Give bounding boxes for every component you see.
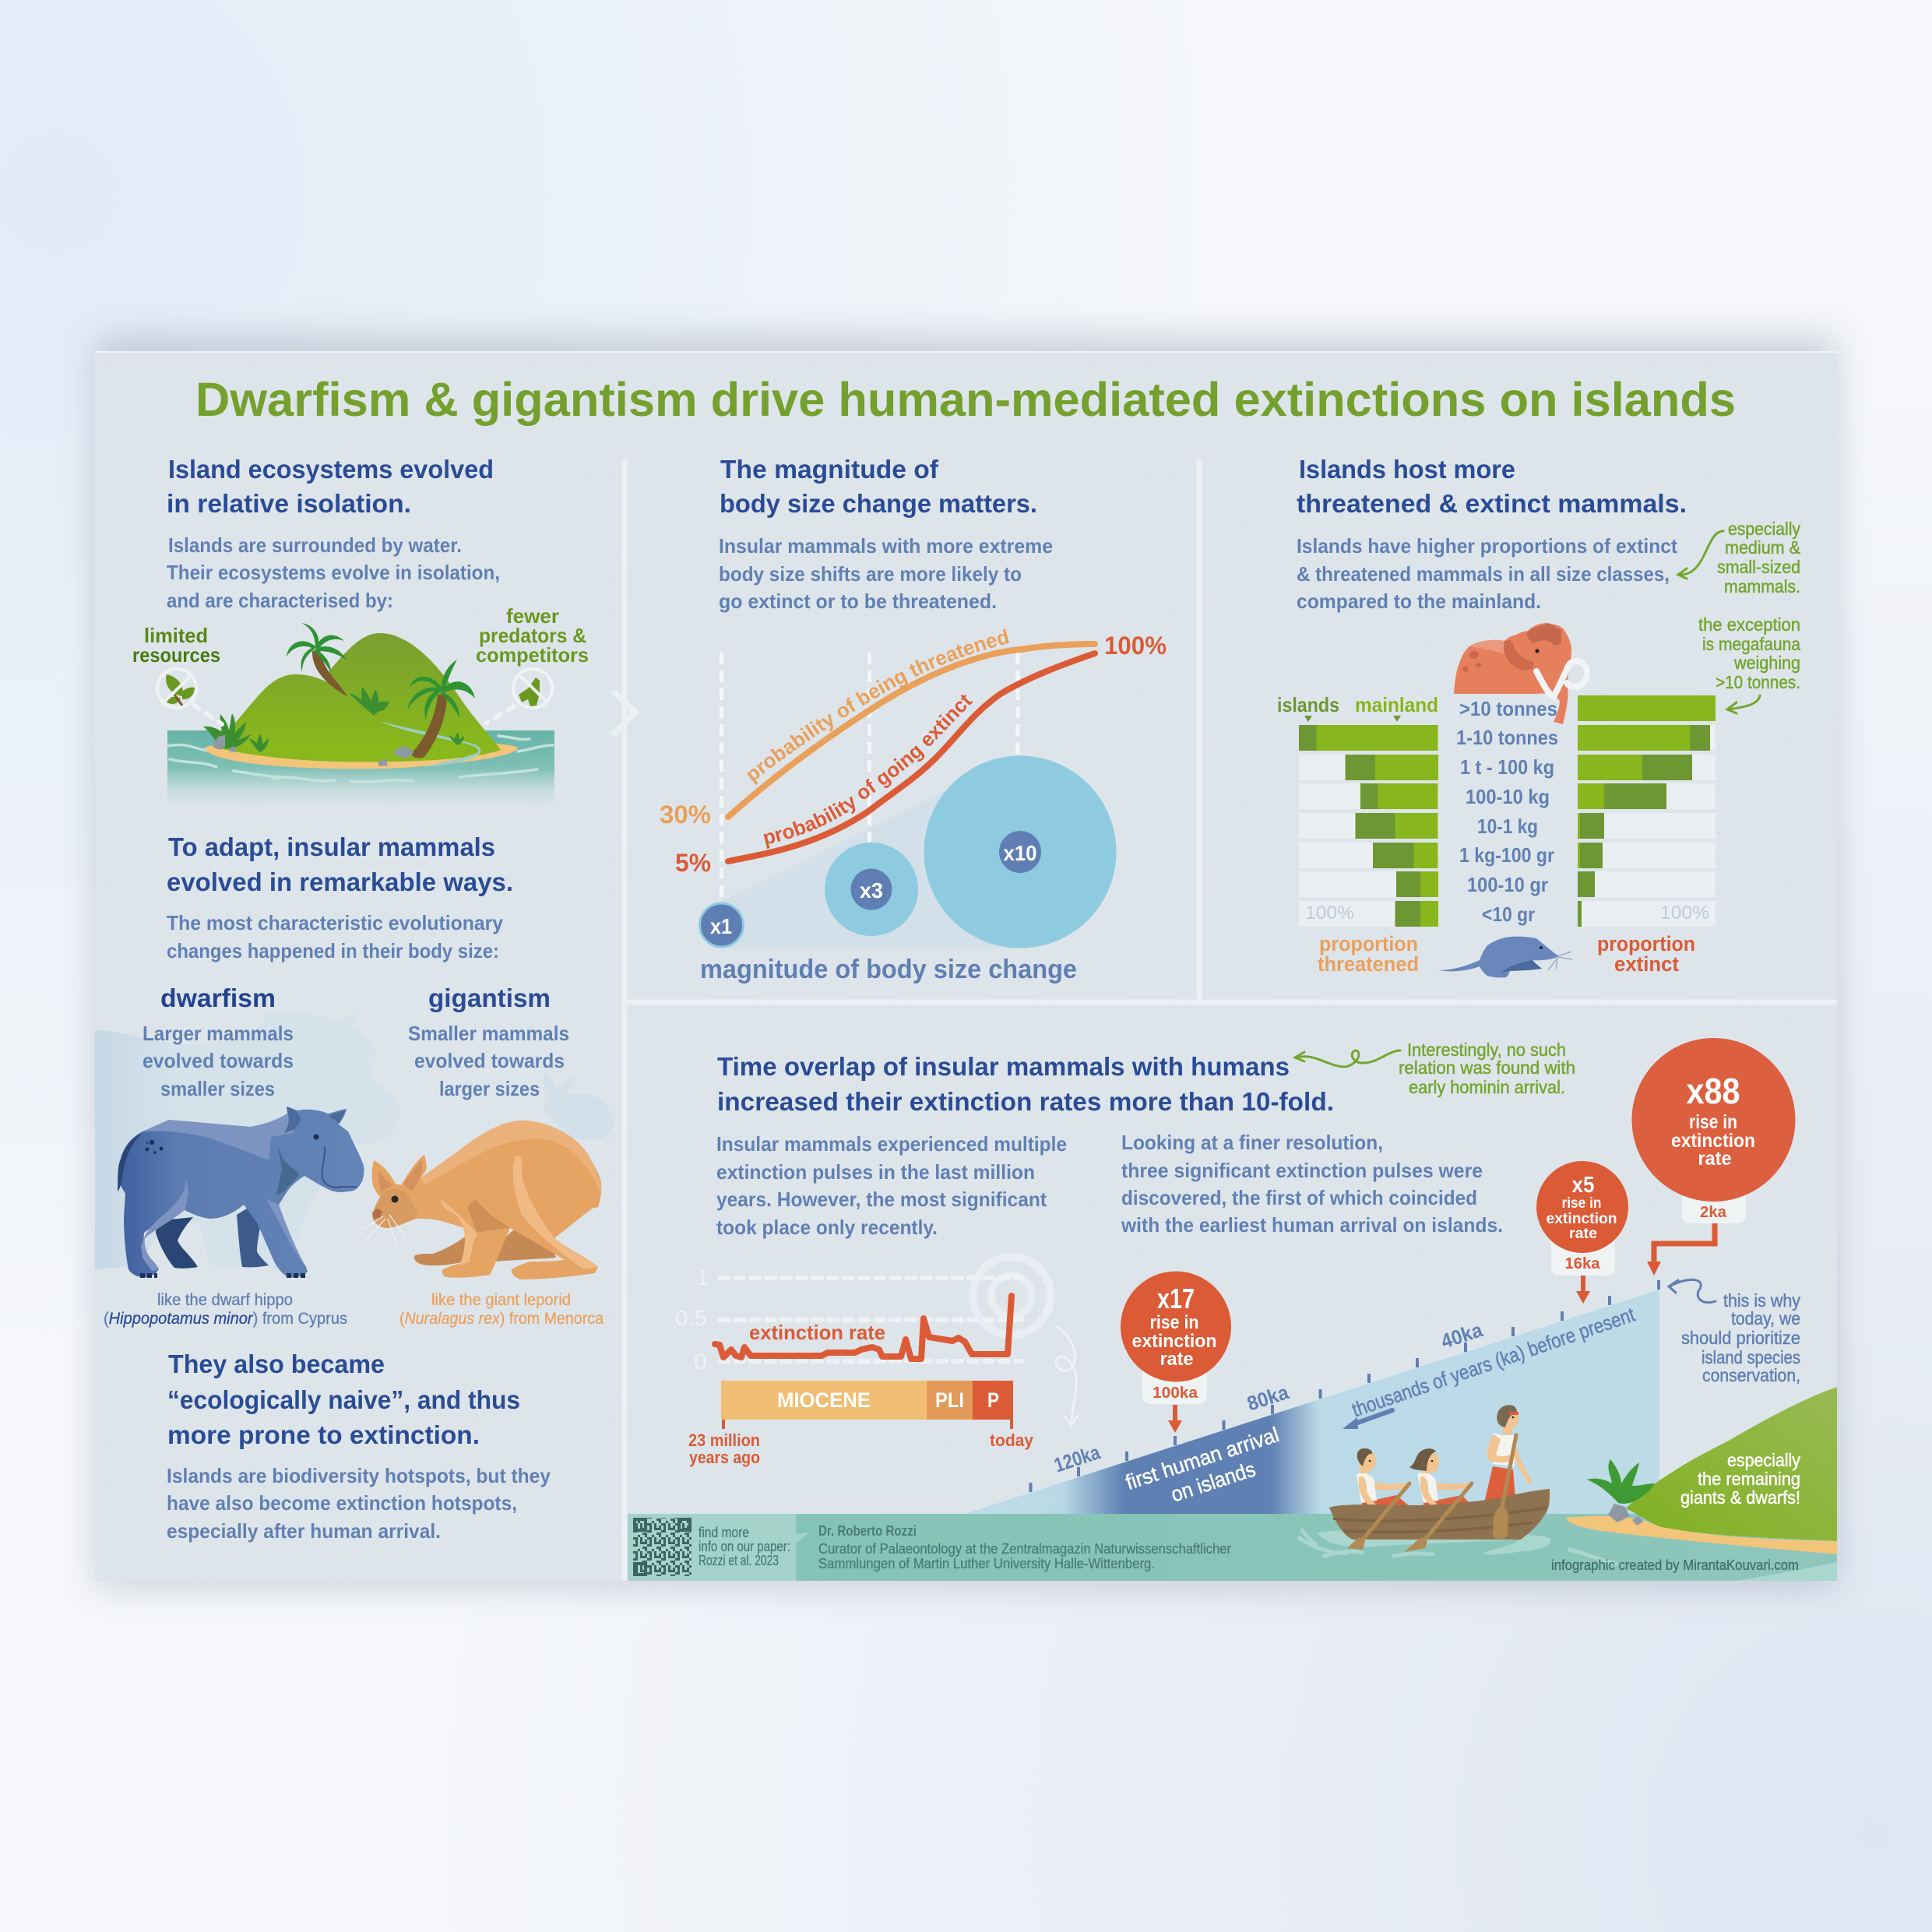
epochs bar (721, 1381, 1013, 1429)
illustration: island (157, 623, 554, 815)
text: credits: Curator of Palaeontology at the Zentralmagazin Naturwissenschaftlicher (818, 1541, 1231, 1557)
text: gigantism (408, 1022, 569, 1100)
icon: no predator (513, 669, 552, 708)
text: proportions (1297, 534, 1677, 613)
note: hominin: early hominin arrival. (1409, 1077, 1565, 1097)
water ripples (1299, 1529, 1837, 1581)
arrow: chevron (613, 691, 635, 735)
panel: left column (95, 455, 614, 1543)
panel: body size magnitude (660, 455, 1167, 984)
circle x3: x3 (860, 878, 883, 903)
axis values (675, 1265, 707, 1374)
note: especially medium: medium & (1725, 537, 1800, 558)
label: 5 percent: 5% (675, 849, 711, 877)
heading: ecologically naive: more prone to extinction. (167, 1420, 480, 1449)
epochs bar: MIOCENE (777, 1388, 871, 1412)
note: exception: the exception (1698, 614, 1800, 635)
label: remaining giants: giants & dwarfs! (1680, 1487, 1800, 1508)
icon: palm tree left (287, 623, 348, 697)
text: finer resolution: discovered, the first of which coincided (1121, 1186, 1477, 1209)
extinction rate line (715, 1296, 1012, 1359)
note: exception: is megafauna (1702, 634, 1800, 654)
timeline wedge (965, 1290, 1659, 1514)
heading: to adapt (167, 832, 513, 896)
heading: to adapt: To adapt, insular mammals (168, 832, 495, 861)
circle x10 (924, 755, 1117, 948)
caption: dwarf hippo: like the dwarf hippo (157, 1291, 293, 1309)
note: especially medium: mammals. (1724, 576, 1800, 596)
size class labels: 100-10 gr (1467, 873, 1548, 896)
note: hominin: relation was found with (1399, 1057, 1575, 1078)
label: fewer predators and competitors (476, 604, 589, 667)
label: remaining giants: especially (1727, 1450, 1800, 1470)
heading: magnitude: The magnitude of (720, 455, 939, 484)
note: hominin: Interestingly, no such (1407, 1040, 1566, 1060)
note: especially medium: especially (1728, 519, 1800, 539)
axis label: threatened (1318, 932, 1419, 976)
text: dwarfism (143, 1022, 294, 1100)
note: conservation: this is why (1723, 1290, 1800, 1311)
heading: islands host more: Islands host more (1299, 455, 1515, 484)
sand (205, 741, 518, 769)
person: rower 2 (1409, 1448, 1473, 1509)
icon: grass clumps (203, 687, 464, 752)
text: hotspots: have also become extinction hotspots, (167, 1491, 517, 1515)
text: finer resolution: with the earliest human arrival on islands. (1121, 1213, 1503, 1237)
curve: extinct (728, 653, 1095, 861)
note: hominin (1399, 1040, 1575, 1097)
heading: ecologically naive (167, 1350, 520, 1449)
label: fewer predators and competitors: competitors (476, 643, 589, 667)
caption: dwarf hippo (104, 1291, 347, 1328)
heading: island ecosystems: Island ecosystems evolved (168, 455, 494, 484)
headings: dwarfism and gigantism (160, 984, 551, 1012)
label: fewer predators and competitors: fewer (506, 604, 559, 628)
callout: x88: x88 (1687, 1071, 1740, 1111)
callout: x5: x5 (1571, 1173, 1595, 1198)
icon: no leaves (157, 669, 196, 708)
note: conservation: island species (1701, 1347, 1800, 1367)
axis maxima: 100% (1305, 903, 1354, 924)
note: conservation: should prioritize (1681, 1328, 1800, 1348)
callout: x88: extinction (1671, 1130, 1755, 1152)
chart: extinction rate (675, 1257, 1050, 1467)
icon: rocks (213, 735, 413, 766)
callout: x17: 100ka (1153, 1385, 1198, 1402)
callout: x17: extinction (1132, 1331, 1216, 1352)
heading: to adapt: evolved in remarkable ways. (167, 867, 513, 896)
callout: x88 (1632, 1038, 1796, 1276)
arrow: conservation note (1669, 1279, 1716, 1303)
label: 23 million (688, 1431, 760, 1467)
arrow: especially note (1678, 531, 1723, 579)
callout: x88: rate (1698, 1148, 1732, 1170)
callout: x5 (1536, 1161, 1628, 1304)
concentric highlight (973, 1257, 1050, 1335)
text: finer resolution (1121, 1131, 1503, 1237)
label: 30 percent: 30% (660, 801, 711, 829)
heading: ecologically naive: “ecologically naive”, and thus (167, 1385, 520, 1414)
size class labels: 1-10 tonnes (1456, 726, 1558, 749)
arrow head: time direction (1343, 1417, 1358, 1429)
axis maxima: 100% (1660, 903, 1709, 924)
heading: ecologically naive: They also became (168, 1350, 385, 1378)
text: magnitude: Insular mammals with more extreme (719, 534, 1053, 558)
text: credits (818, 1523, 1231, 1571)
panel: threatened and extinct mammals (1277, 455, 1800, 977)
label: axis thousands of years: thousands of years (ka) before present (1349, 1302, 1638, 1421)
axis label: threatened: threatened (1318, 952, 1419, 976)
arrow: zoom squiggle (1056, 1326, 1078, 1425)
legend: islands and mainland (1277, 693, 1438, 722)
caption: dwarf hippo: (Hippopotamus minor) from Cyprus (104, 1310, 347, 1328)
text: proportions: & threatened mammals in all size classes, (1297, 562, 1670, 586)
text: magnitude: body size shifts are more likely to (719, 562, 1022, 586)
river (379, 721, 480, 767)
text: dwarfism: smaller sizes (160, 1077, 275, 1100)
labels: ka ticks (1051, 1318, 1486, 1477)
text: find more: info on our paper: (699, 1539, 790, 1554)
QR code (633, 1518, 692, 1576)
label: today: today (990, 1431, 1034, 1450)
label: first human arrival: first human arrival (1123, 1423, 1282, 1494)
dotted callout lines (193, 705, 514, 724)
illustration: island shore (1567, 1387, 1837, 1554)
heading: islands host more (1297, 455, 1687, 518)
boat hull (1329, 1489, 1550, 1540)
epochs bar: P (987, 1388, 999, 1412)
text: hotspots (167, 1464, 551, 1543)
label: limited resources (132, 624, 220, 667)
circle x10: x10 (1003, 841, 1037, 865)
column dividers (625, 459, 1837, 1581)
illustration: dwarf hippo (118, 1107, 364, 1278)
note: especially medium (1717, 519, 1800, 596)
card shadow (95, 336, 1837, 1587)
text: proportions: compared to the mainland. (1297, 589, 1541, 613)
icon: palm tree right (407, 660, 475, 758)
text: dwarfism: evolved towards (143, 1049, 294, 1072)
text: dwarfism: Larger mammals (143, 1022, 294, 1045)
heading: islands host more: threatened & extinct mammals. (1297, 489, 1687, 518)
text: extinction pulses: years. However, the most significant (716, 1188, 1047, 1211)
axis label: extinct: extinct (1614, 952, 1679, 976)
text: gigantism: larger sizes (439, 1077, 540, 1100)
note: conservation: today, we (1731, 1308, 1800, 1328)
axis label: threatened: proportion (1319, 932, 1418, 955)
text: credits: Sammlungen of Martin Luther University Halle-Wittenberg. (818, 1556, 1155, 1571)
oars and paddle (1363, 1435, 1516, 1540)
note: exception (1698, 614, 1800, 692)
callout: x5: rate (1569, 1226, 1597, 1242)
title: Dwarfism & gigantism drive human-mediated extinctions on islands (195, 373, 1736, 426)
headings: dwarfism and gigantism: dwarfism (160, 984, 276, 1012)
size class labels: 10-1 kg (1477, 815, 1538, 838)
curve: threatened (728, 644, 1095, 817)
label: remaining giants (1680, 1450, 1800, 1508)
text: extinction pulses: extinction pulses in the last million (716, 1160, 1035, 1184)
epochs bar: PLI (935, 1388, 964, 1412)
label: limited resources: resources (132, 643, 220, 667)
callout: x88: rise in (1689, 1111, 1737, 1133)
text: islands intro: and are characterised by: (167, 589, 393, 612)
bars: threatened (1299, 725, 1438, 927)
heading: island ecosystems (167, 455, 494, 518)
size class labels: 1 t - 100 kg (1460, 755, 1554, 779)
label: fewer predators and competitors: predators & (479, 624, 586, 647)
illustration: giant leporid (362, 1121, 601, 1279)
label: remaining giants: the remaining (1698, 1469, 1800, 1489)
callout: x17: rate (1160, 1349, 1193, 1370)
label: 23 million: years ago (689, 1448, 760, 1467)
caption: giant leporid (399, 1291, 604, 1328)
panel: human overlap timeline (628, 1038, 1837, 1581)
heading: time overlap: increased their extinction rates more than 10-fold. (717, 1087, 1334, 1116)
axis values: 1 (699, 1265, 707, 1290)
label: first human arrival: on islands (1168, 1457, 1258, 1507)
text: magnitude: go extinct or to be threatened. (719, 589, 997, 613)
caption: giant leporid: (Nuralagus rex) from Menorca (399, 1310, 604, 1328)
label: extinction rate: extinction rate (749, 1321, 885, 1344)
illustration: rowing boat with people (1329, 1405, 1550, 1552)
timeline ticks (1031, 1280, 1659, 1492)
axis label: extinct (1597, 932, 1695, 976)
note: exception: >10 tonnes. (1716, 672, 1800, 692)
chart: body size probability curves (660, 629, 1167, 984)
text: body size: changes happened in their body size: (167, 939, 499, 962)
size class labels: >10 tonnes (1459, 697, 1557, 720)
size class labels: 1 kg-100 gr (1459, 843, 1554, 867)
note: exception: weighing (1733, 653, 1800, 673)
text: body size (167, 911, 504, 962)
text: hotspots: Islands are biodiversity hotspots, but they (167, 1464, 551, 1487)
text: body size: The most characteristic evolutionary (167, 911, 504, 934)
labels: ka ticks: 80ka (1244, 1380, 1292, 1416)
axis label: extinct: proportion (1597, 932, 1695, 955)
callout: x5: extinction (1547, 1211, 1617, 1227)
text: finer resolution: three significant extinction pulses were (1121, 1159, 1483, 1182)
text: find more: Rozzi et al. 2023 (699, 1553, 779, 1568)
text: credits: Dr. Roberto Rozzi (818, 1523, 917, 1539)
text: islands intro (167, 533, 500, 612)
heading: time overlap (717, 1052, 1334, 1116)
arrow: time direction (1351, 1410, 1392, 1425)
label: 23 million: 23 million (688, 1431, 760, 1450)
label: limited resources: limited (144, 624, 208, 647)
note: especially medium: small-sized (1717, 557, 1800, 577)
illustration: mammoth (1454, 623, 1587, 724)
text: proportions: Islands have higher proportions of extinct (1297, 534, 1677, 558)
text: magnitude (719, 534, 1053, 613)
axis values: 0 (694, 1350, 707, 1374)
ghost silhouette: large hippo (95, 1012, 399, 1279)
heading: island ecosystems: in relative isolation. (167, 489, 411, 518)
callout: x88: 2ka (1700, 1204, 1727, 1221)
legend: islands and mainland: islands (1277, 693, 1339, 716)
axis label: magnitude of body size change (700, 955, 1077, 984)
axis maxima (1305, 903, 1709, 924)
text: find more (699, 1525, 790, 1568)
callout: x5: 16ka (1565, 1255, 1600, 1272)
labels: ka ticks: 40ka (1438, 1318, 1486, 1353)
text: extinction pulses: took place only recently. (716, 1216, 938, 1239)
circle x1: x1 (710, 914, 732, 938)
label: 100 percent: 100% (1104, 632, 1167, 660)
text: hotspots: especially after human arrival. (167, 1519, 441, 1543)
heading: magnitude (720, 455, 1037, 518)
text: infographic credit: infographic created by MirantaKouvari.com (1551, 1557, 1799, 1573)
text: find more: find more (699, 1525, 749, 1540)
bars: extinct (1578, 695, 1716, 927)
note: conservation (1681, 1290, 1800, 1385)
label: extinct probability: probability of going extinct (763, 695, 973, 849)
illustration: shrew (1438, 937, 1572, 977)
size class labels: 100-10 kg (1466, 785, 1550, 808)
label: threatened probability: probability of being threatened (746, 629, 1009, 785)
heading: magnitude: body size change matters. (720, 489, 1037, 518)
caption: giant leporid: like the giant leporid (431, 1291, 571, 1309)
infographic card (95, 351, 1837, 1581)
size class labels (1456, 697, 1558, 926)
axis values: 0.5 (675, 1306, 707, 1330)
heading: time overlap: Time overlap of insular mammals with humans (717, 1052, 1290, 1081)
text: islands intro: Islands are surrounded by water. (168, 533, 462, 557)
callout: x5: rise in (1562, 1195, 1601, 1212)
headings: dwarfism and gigantism: gigantism (428, 984, 551, 1012)
arrow: hominin note (1295, 1050, 1400, 1067)
person: rower 1 (1357, 1448, 1415, 1513)
text: finer resolution: Looking at a finer resolution, (1121, 1131, 1383, 1154)
chart: size class bars (1277, 623, 1716, 976)
circle x1 (699, 903, 743, 947)
person: standing paddler (1483, 1405, 1533, 1506)
text: gigantism: Smaller mammals (408, 1022, 569, 1045)
text: islands intro: Their ecosystems evolve in isolation, (167, 561, 500, 584)
callout: x17: rise in (1149, 1312, 1199, 1333)
arrow: exception note (1727, 695, 1760, 713)
size class labels: <10 gr (1482, 903, 1535, 926)
footer: water band (628, 1514, 1837, 1581)
text: extinction pulses: Insular mammals experienced multiple (716, 1132, 1067, 1156)
text: extinction pulses (716, 1132, 1067, 1239)
callout: x17 (1121, 1271, 1231, 1433)
circle x3 (825, 843, 918, 936)
note: conservation: conservation, (1702, 1365, 1800, 1385)
callout: x17: x17 (1157, 1283, 1195, 1314)
ghost silhouette: rabbit (543, 1071, 614, 1139)
legend: islands and mainland: mainland (1355, 693, 1438, 716)
labels: ka ticks: 120ka (1051, 1440, 1103, 1477)
text: gigantism: evolved towards (414, 1049, 565, 1072)
